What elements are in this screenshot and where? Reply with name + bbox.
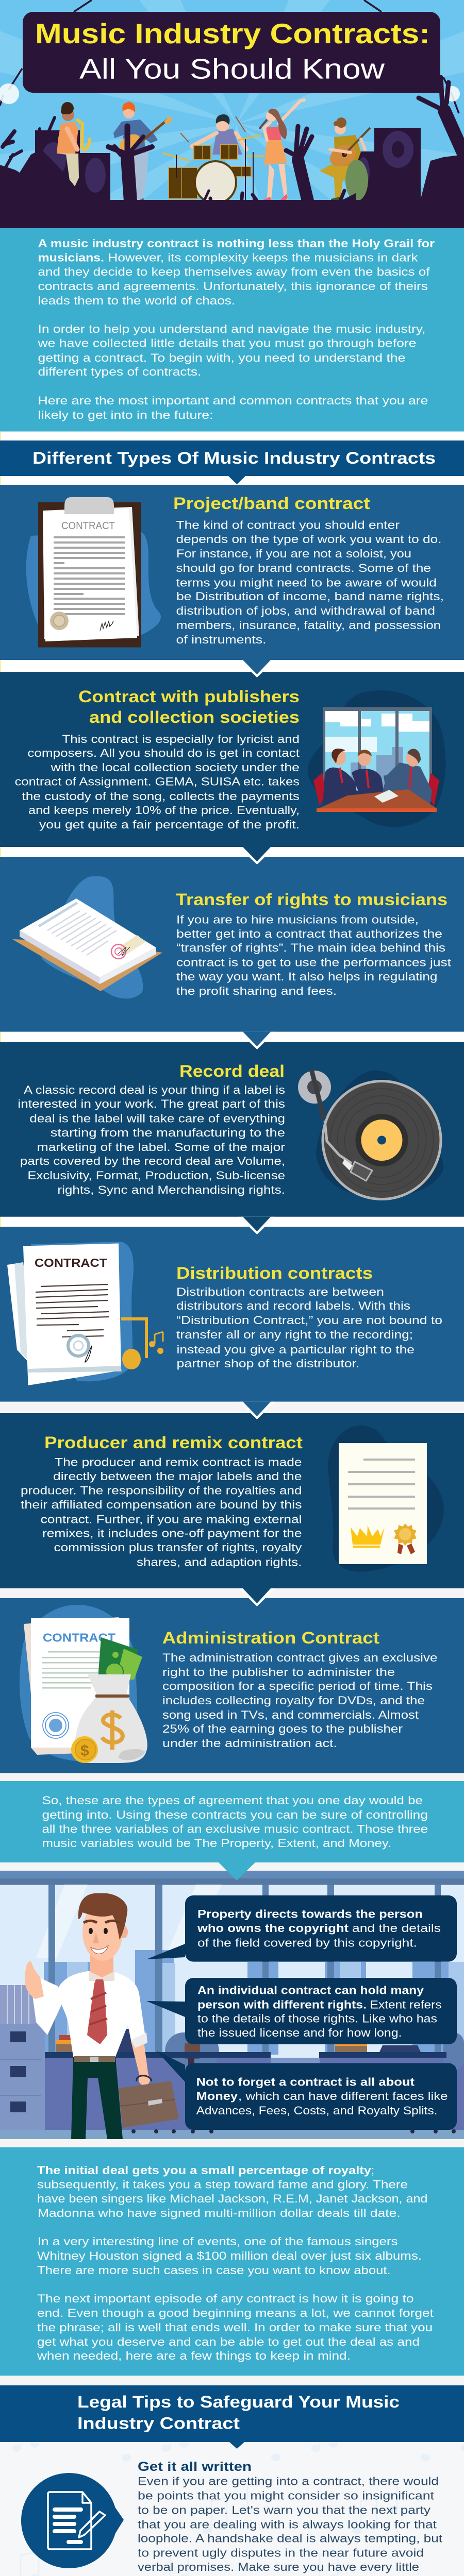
- panel: introduction: contracts and agreements. Unfortunately, this ignorance of theirs: [38, 280, 428, 293]
- body text: 25% of the earning goes to the publisher: [162, 1722, 403, 1735]
- panel: introduction: leads them to the world of chaos.: [38, 294, 235, 307]
- hero illustration: [0, 0, 464, 228]
- panel: distribution contracts: [0, 1217, 464, 1402]
- panel: introduction: Here are the most important and common contracts that you are: [38, 394, 428, 407]
- heading: Transfer of rights to musicians: [176, 890, 448, 909]
- acoustic guitarist: [320, 117, 370, 201]
- body text: rights, Sync and Merchandising rights.: [57, 1183, 285, 1196]
- panel: initial deal text: have been singers like Michael Jackson, R.E.M, Janet Jackson, and: [37, 2192, 428, 2205]
- speakers: [35, 128, 421, 202]
- illustration: contract and money bag: $: [80, 1742, 89, 1759]
- body text: be Distribution of income, band name rights,: [176, 590, 444, 603]
- body text: starting from the manufacturing to the: [51, 1126, 285, 1139]
- panel: record deal: [0, 1032, 464, 1217]
- callout: money: Not to forget a contract is all about: [196, 2075, 415, 2088]
- filing cabinet and binders: [0, 1985, 45, 2130]
- arrow: [239, 1588, 275, 1606]
- illustration: signed document: [12, 876, 162, 998]
- heading banner: different types of contracts: Different Types Of Music Industry Contracts: [32, 449, 436, 467]
- panel: initial deal text: The initial deal gets you a small percentage of royalty: [37, 2164, 372, 2177]
- panel: initial deal text: In a very interesting line of events, one of the famous singers: [38, 2235, 398, 2248]
- panel: initial deal text: [0, 2147, 464, 2376]
- body text: [18, 1083, 285, 1196]
- illustration: office scene: [0, 1871, 464, 2139]
- heading: Project/band contract: [173, 494, 370, 513]
- body text: [15, 733, 300, 831]
- panel: project/band contract: [0, 485, 464, 660]
- illustration: contract and money bag: CONTRACT: [43, 1631, 115, 1645]
- panel: introduction: A music industry contract is nothing less than the Holy Grail for: [38, 237, 435, 250]
- callout: property: [146, 1895, 457, 1962]
- saxophone player: [57, 102, 90, 187]
- panel: initial deal text: Whitney Houston signed a $100 million deal over just six albums.: [37, 2249, 422, 2262]
- body text: terms you might need to be aware of would: [176, 576, 437, 589]
- arrow: [239, 847, 275, 865]
- body text: partner shop of the distributor.: [176, 1357, 360, 1370]
- panel: three variables text: all the three variables of an exclusive music contract. Those three: [42, 1823, 428, 1836]
- body text: If you are to hire musicians from outside,: [176, 913, 419, 926]
- callout: money: Money: [196, 2090, 238, 2103]
- body text: the profit sharing and fees.: [176, 985, 337, 997]
- body text: that you are dealing with is always looking for that: [138, 2518, 437, 2531]
- body text: The administration contract gives an exclusive: [162, 1651, 437, 1664]
- body text: marketing of the label. Some of the major: [37, 1141, 285, 1154]
- heading: Record deal: [179, 1062, 285, 1080]
- body text: right to the publisher to administer the: [162, 1666, 395, 1679]
- panel: three variables text: [0, 1781, 464, 1862]
- body text: under the administration act.: [162, 1737, 337, 1750]
- panel: introduction: musicians.: [38, 251, 104, 264]
- title banner: Music Industry Contracts:: [35, 18, 430, 49]
- body text: better get into a contract that authorizes the: [176, 927, 442, 940]
- body text: should go for brand contracts. Some of the: [176, 562, 431, 574]
- body text: to be on paper. Let's warn you that the next party: [138, 2504, 430, 2517]
- panel: introduction: likely to get into in the future:: [38, 409, 213, 421]
- body text: interested in your work. The great part of this: [18, 1097, 285, 1110]
- body text: Distribution contracts are between: [176, 1285, 384, 1298]
- body text: This contract is especially for lyricist and: [62, 733, 300, 745]
- panel: initial deal text: The next important episode of any contract is how it is going to: [37, 2292, 413, 2305]
- body text: composition for a specific period of time. This: [162, 1680, 433, 1692]
- businessman character: [25, 1893, 179, 2139]
- body text: [162, 1651, 437, 1750]
- heading: Producer and remix contract: [44, 1433, 303, 1452]
- body text: of instruments.: [176, 633, 266, 646]
- body text: distributors and record labels. With this: [176, 1299, 410, 1312]
- panel: three variables text: So, these are the types of agreement that you one day would be: [42, 1794, 423, 1807]
- body text: their affiliated compensation are bound by this: [21, 1498, 302, 1511]
- panel: contract with publishers and collection societies: [0, 660, 464, 847]
- body text: and keeps merely 10% of the price. Eventually,: [28, 804, 300, 817]
- body text: distribution of jobs, and withdrawal of band: [176, 604, 435, 617]
- panel: transfer of rights to musicians: [0, 847, 464, 1032]
- illustration: contract and money bag: [20, 1605, 147, 1763]
- body text: the way you want. It also helps in regulating: [176, 970, 437, 983]
- body text: members, insurance, fatality, and possession: [176, 619, 441, 632]
- drum kit and drummer: [162, 114, 264, 204]
- body text: [138, 2475, 442, 2576]
- body text: contract is to get to use the performances just: [176, 956, 451, 969]
- heading: [78, 687, 300, 726]
- body text: you get quite a fair percentage of the profit.: [39, 818, 300, 831]
- arrow: [239, 660, 275, 677]
- illustration: contract with music notes: [7, 1242, 163, 1385]
- callout: money: [157, 2051, 457, 2130]
- body text: includes collecting royalty for DVDs, and the: [162, 1694, 425, 1707]
- arrow: [239, 1402, 275, 1419]
- callout: extent: person with different rights.: [197, 1998, 367, 2011]
- panel: introduction: In order to help you understand and navigate the music industry,: [38, 323, 426, 335]
- panel: initial deal text: ;: [371, 2164, 374, 2177]
- panel: three variables text: music variables would be The Property, Extent, and Money.: [42, 1837, 391, 1850]
- heading: Distribution contracts: [176, 1264, 373, 1282]
- illustration: business meeting: [308, 690, 445, 827]
- singer: [259, 100, 304, 204]
- heading: and collection societies: [89, 708, 300, 726]
- callout: extent: [146, 1978, 457, 2044]
- callout: property: who owns the copyright: [197, 1922, 349, 1935]
- body text: transfer all or any right to the recording;: [176, 1328, 413, 1341]
- panel: introduction: [0, 228, 464, 432]
- callout: money: Advances, Fees, Costs, and Royalty Splits.: [196, 2104, 437, 2117]
- body text: composers. All you should do is get in contact: [27, 747, 300, 759]
- callout: property: and the details: [352, 1922, 441, 1935]
- body text: “transfer of rights”. The main idea behind this: [176, 941, 445, 954]
- tip: get it all written: [21, 2460, 442, 2576]
- body text: loophole. A handshake deal is always tempting, but: [138, 2532, 442, 2545]
- body text: deal is the label will take care of everything: [29, 1112, 285, 1125]
- body text: For instance, if you are not a soloist, you: [176, 547, 411, 560]
- heading banner: legal tips: Industry Contract: [77, 2414, 240, 2433]
- panel: initial deal text: Madonna who have signed multi-million dollar deals till date.: [38, 2207, 401, 2219]
- callout: extent: Extent refers: [370, 1998, 442, 2011]
- body text: to prevent ugly disputes in the near future avoid: [138, 2546, 424, 2560]
- body text: directly between the major labels and the: [53, 1470, 302, 1483]
- panel: introduction: getting a contract. To begin with, you need to understand the: [38, 351, 405, 364]
- body text: verbal promises. Make sure you have every little: [138, 2561, 419, 2573]
- callout: money: , which can have different faces like: [238, 2090, 448, 2103]
- panel: administration contract: [0, 1588, 464, 1773]
- body text: contract. Further, if you are making external: [41, 1513, 302, 1526]
- body text: The producer and remix contract is made: [55, 1455, 302, 1468]
- arrow: cyan pointer: [219, 1862, 255, 1880]
- chair wheels: [131, 2129, 456, 2133]
- icon: document and pen: [21, 2473, 124, 2568]
- panel: initial deal text: There are more such cases in case you want to know about.: [37, 2264, 391, 2277]
- body text: Exclusivity, Format, Production, Sub-license: [27, 1169, 285, 1182]
- illustration: contract with music notes: CONTRACT: [35, 1256, 107, 1269]
- body text: with the local collection society under the: [50, 761, 300, 774]
- illustration: vinyl turntable: [298, 1070, 443, 1200]
- body text: producer. The responsibility of the royalties and: [21, 1484, 302, 1497]
- illustration: certificate: [328, 1426, 444, 1572]
- heading: Contract with publishers: [78, 687, 300, 706]
- callout: property: Property directs towards the person: [197, 1908, 423, 1921]
- stage lights and rigging: [0, 0, 460, 113]
- body text: instead you give a particular right to the: [176, 1343, 415, 1356]
- body text: “Distribution Contract,” you are not bound to: [176, 1314, 442, 1327]
- heading banner: legal tips: [0, 2385, 464, 2449]
- icon: gold crown: [351, 1526, 385, 1548]
- panel: initial deal text: the phrase; all is well that ends well. In order to make sure that you: [37, 2321, 433, 2334]
- panel: introduction: However, its complexity keeps the musicians in dark: [108, 251, 419, 264]
- body text: be points that you might consider so insignificant: [138, 2489, 434, 2502]
- title banner: All You Should Know: [79, 53, 385, 84]
- callout: property: of the field covered by this copyright.: [197, 1937, 417, 1950]
- body text: Even if you are getting into a contract, there would: [138, 2475, 439, 2488]
- arrow: [239, 1217, 275, 1234]
- heading: Administration Contract: [162, 1629, 379, 1647]
- body text: parts covered by the record deal are Volume,: [20, 1155, 285, 1167]
- body text: [21, 1455, 302, 1568]
- body text: song used in TVs, and commercials. Almost: [162, 1708, 419, 1721]
- icon: clipboard contract: [26, 497, 161, 647]
- panel: introduction: we have collected little details that you must go through before: [37, 337, 417, 350]
- heading banner: different types of contracts: [0, 440, 464, 484]
- panel: initial deal text: when needed, here are a few things to keep in mind.: [37, 2349, 351, 2362]
- callout: extent: the issued license and for how long.: [197, 2026, 402, 2039]
- panel: initial deal text: get what you deserve and can be able to get out the deal as and: [37, 2335, 420, 2348]
- body text: depends on the type of work you want to do.: [176, 533, 441, 546]
- body text: the custody of the song, collects the payments: [22, 790, 300, 803]
- panel: initial deal text: end. Even though a good beginning means a lot, we cannot forget: [37, 2307, 434, 2319]
- body text: commission plus transfer of rights, royalty: [54, 1541, 302, 1554]
- panel: producer and remix contract: [0, 1402, 464, 1588]
- panel: three variables text: getting into. Using these contracts you can be sure of controlling: [42, 1808, 428, 1821]
- bass guitarist: [113, 101, 172, 204]
- panel: introduction: and they decide to keep themselves away from even the basics of: [38, 265, 430, 278]
- arrow: [239, 1032, 275, 1049]
- heading banner: legal tips: Legal Tips to Safeguard Your Music: [77, 2393, 400, 2411]
- callout: extent: An individual contract can hold many: [197, 1984, 424, 1997]
- body text: A classic record deal is your thing if a label is: [24, 1083, 285, 1096]
- body text: [176, 518, 444, 646]
- callout: extent: to the details of those rights. Like who has: [197, 2012, 437, 2025]
- body text: The kind of contract you should enter: [176, 518, 400, 532]
- crowd silhouette: [0, 77, 464, 228]
- title banner: [23, 12, 440, 93]
- heading: Get it all written: [138, 2460, 252, 2474]
- body text: contract of Assignment. GEMA, SUISA etc. takes: [15, 775, 300, 788]
- panel: initial deal text: subsequently, it takes you a step toward fame and glory. There: [37, 2178, 408, 2191]
- panel: introduction: different types of contracts.: [38, 365, 201, 378]
- body text: [176, 1285, 442, 1370]
- body text: [176, 913, 451, 997]
- body text: remixes, it includes one-off payment for the: [42, 1527, 302, 1539]
- icon: clipboard contract: CONTRACT: [61, 520, 115, 532]
- body text: shares, and adaption rights.: [137, 1556, 302, 1568]
- icon: medal: [394, 1523, 417, 1554]
